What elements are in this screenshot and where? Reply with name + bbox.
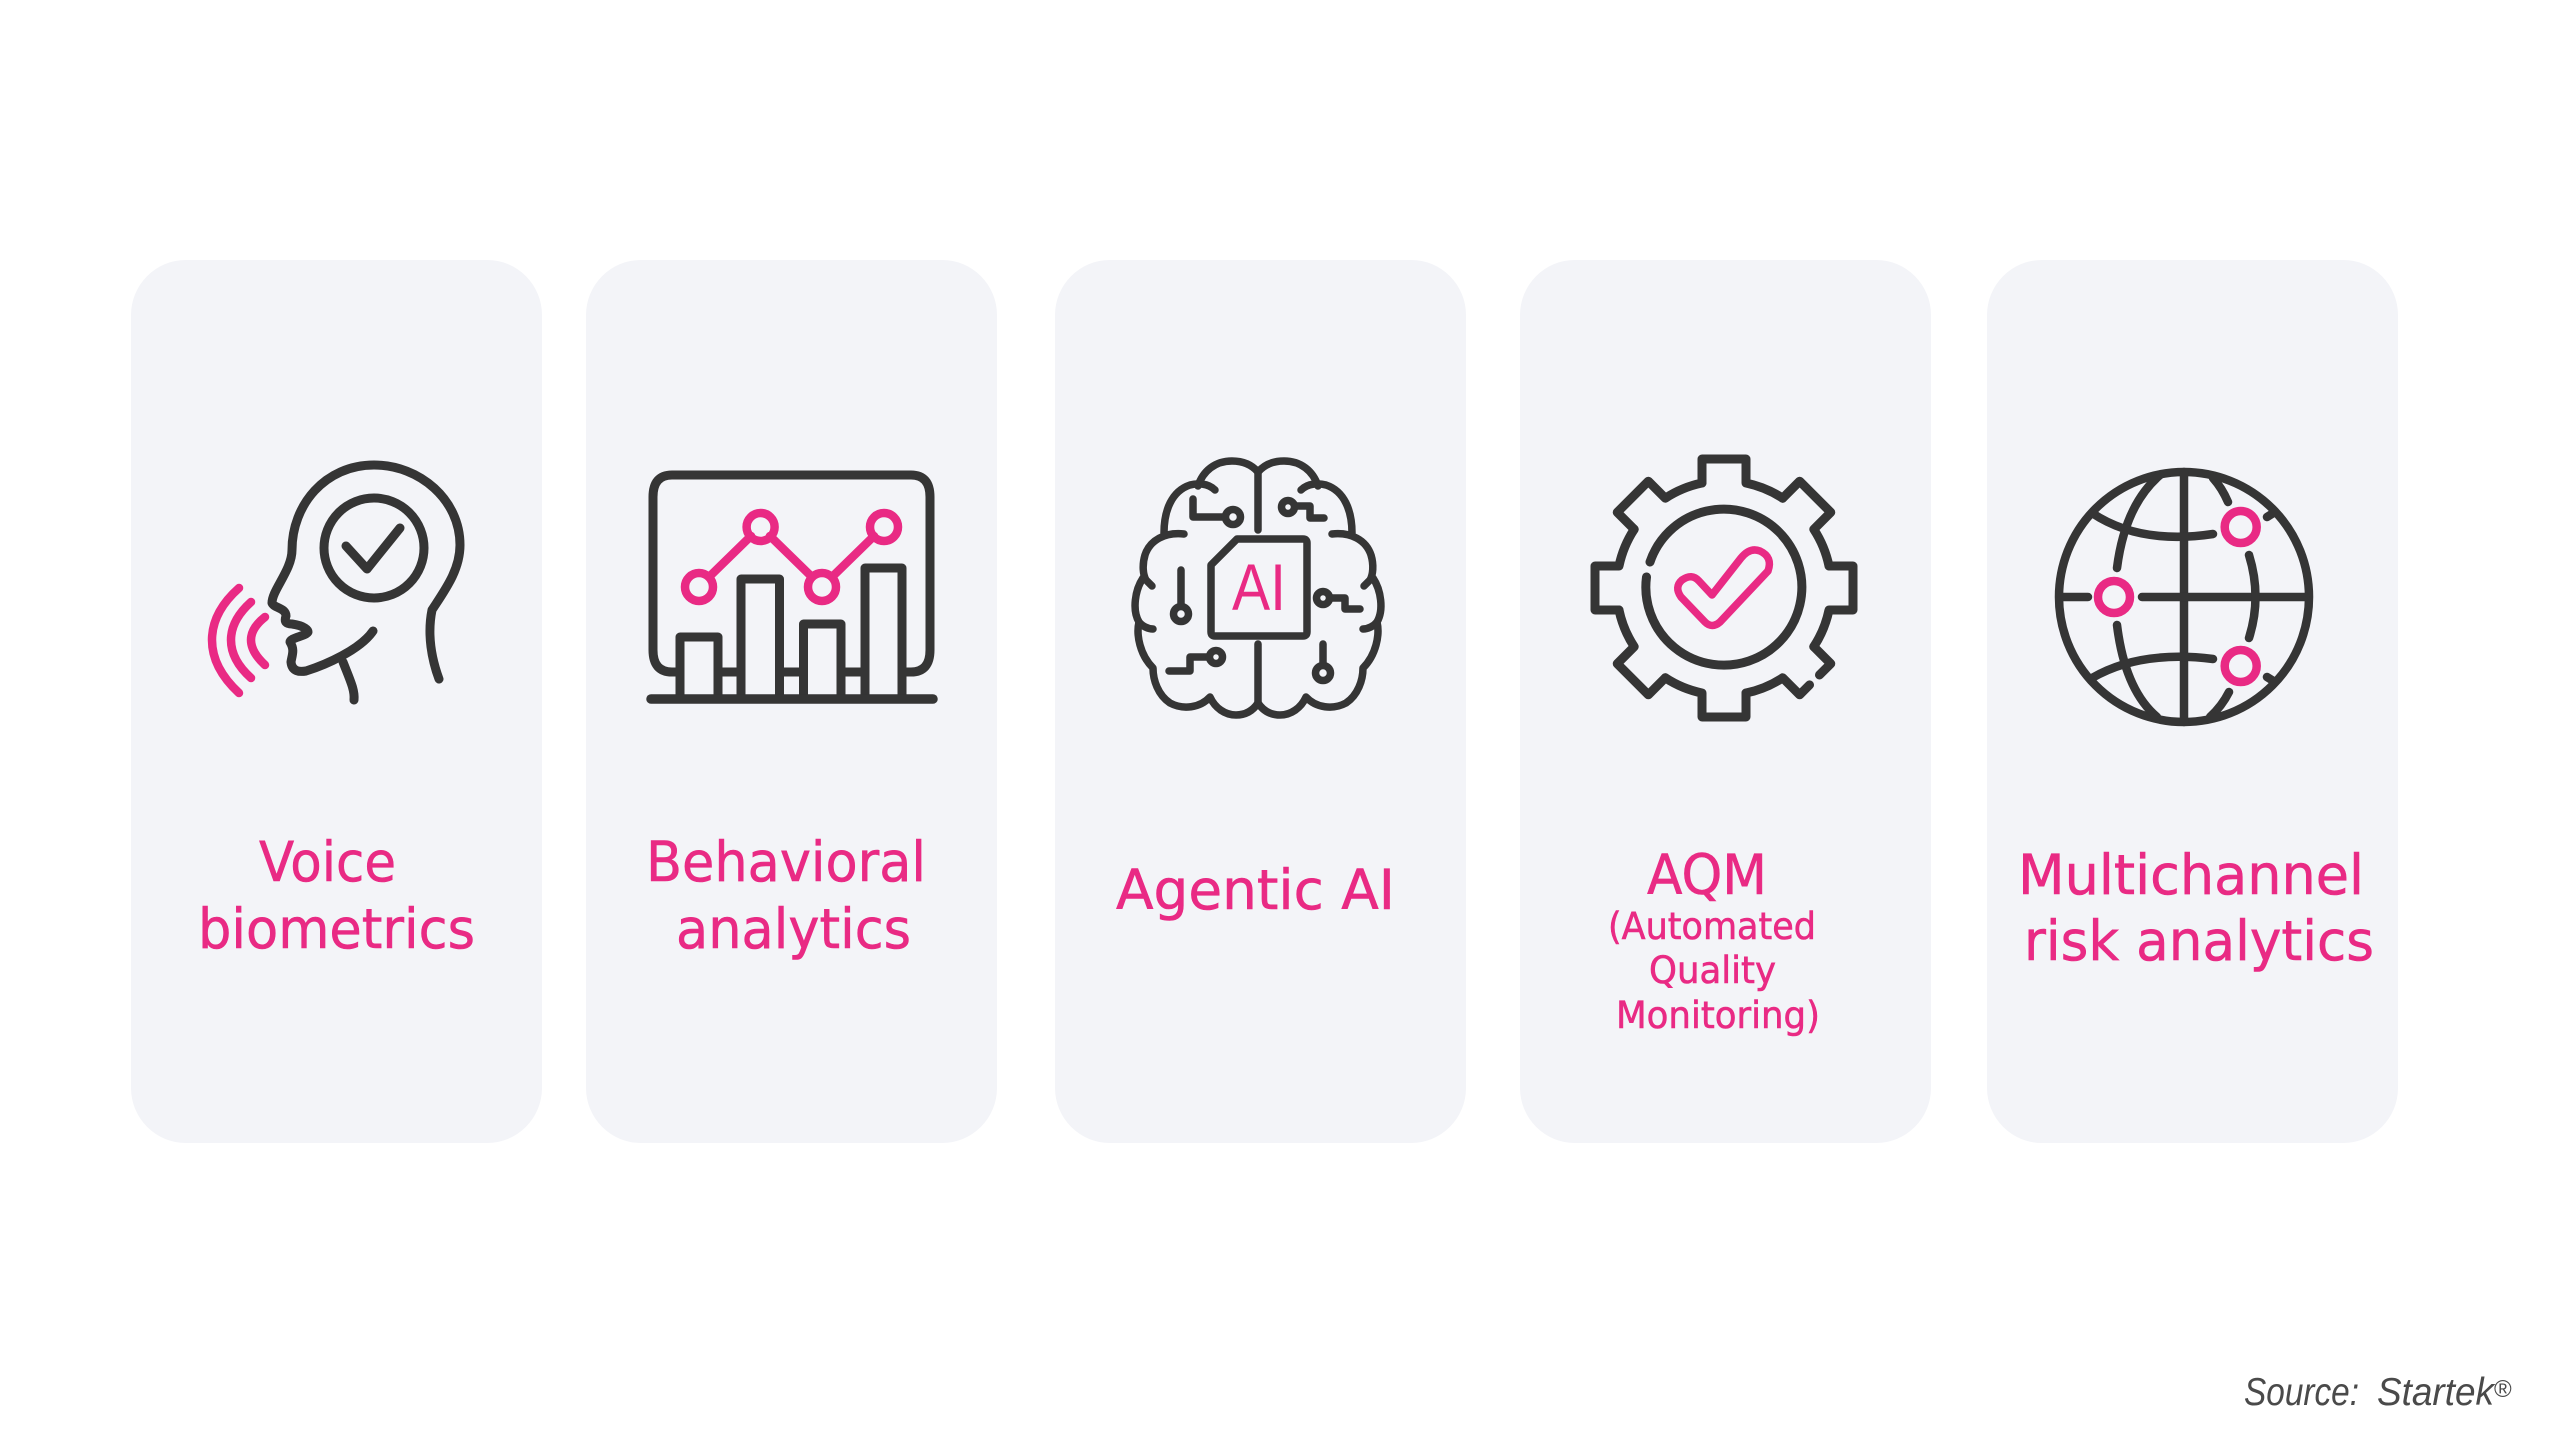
label: voice biometrics: Voice xyxy=(259,830,396,894)
label: AQM: AQM xyxy=(1647,843,1767,907)
label: AQM xyxy=(1608,843,1820,1037)
icon: speaking head with check xyxy=(212,465,460,700)
icon text: AI: AI xyxy=(1232,550,1286,624)
label: AQM: Monitoring) xyxy=(1616,994,1820,1037)
panel: behavioral analytics xyxy=(586,260,997,1143)
label: multichannel risk analytics: risk analytics xyxy=(2024,909,2374,973)
panel: multichannel risk analytics xyxy=(1987,260,2398,1143)
icon: gear with check xyxy=(1591,455,1857,721)
source note: ® xyxy=(2494,1376,2512,1403)
label: multichannel risk analytics xyxy=(2018,843,2374,973)
panel: voice biometrics xyxy=(131,260,542,1143)
panel: agentic AI xyxy=(1055,260,1466,1143)
label: agentic AI: Agentic AI xyxy=(1116,858,1395,922)
icon: globe with nodes xyxy=(2059,472,2309,722)
source note: Source: xyxy=(2244,1371,2359,1414)
label: voice biometrics: biometrics xyxy=(198,897,475,961)
icon: AI brain xyxy=(1135,461,1381,715)
check mark xyxy=(1678,550,1769,626)
source note xyxy=(2244,1371,2512,1414)
label: voice biometrics xyxy=(198,830,475,961)
source note: Startek xyxy=(2377,1371,2496,1414)
label: behavioral analytics xyxy=(646,830,926,961)
label: multichannel risk analytics: Multichannel xyxy=(2018,843,2364,907)
label: behavioral analytics: analytics xyxy=(676,897,911,961)
icon: monitor with bars and trend line xyxy=(651,475,933,699)
label: AQM: (Automated xyxy=(1608,905,1816,948)
trend line xyxy=(685,513,898,601)
label: AQM: Quality xyxy=(1649,949,1776,992)
label: behavioral analytics: Behavioral xyxy=(646,830,926,894)
panel: AQM xyxy=(1520,260,1931,1143)
